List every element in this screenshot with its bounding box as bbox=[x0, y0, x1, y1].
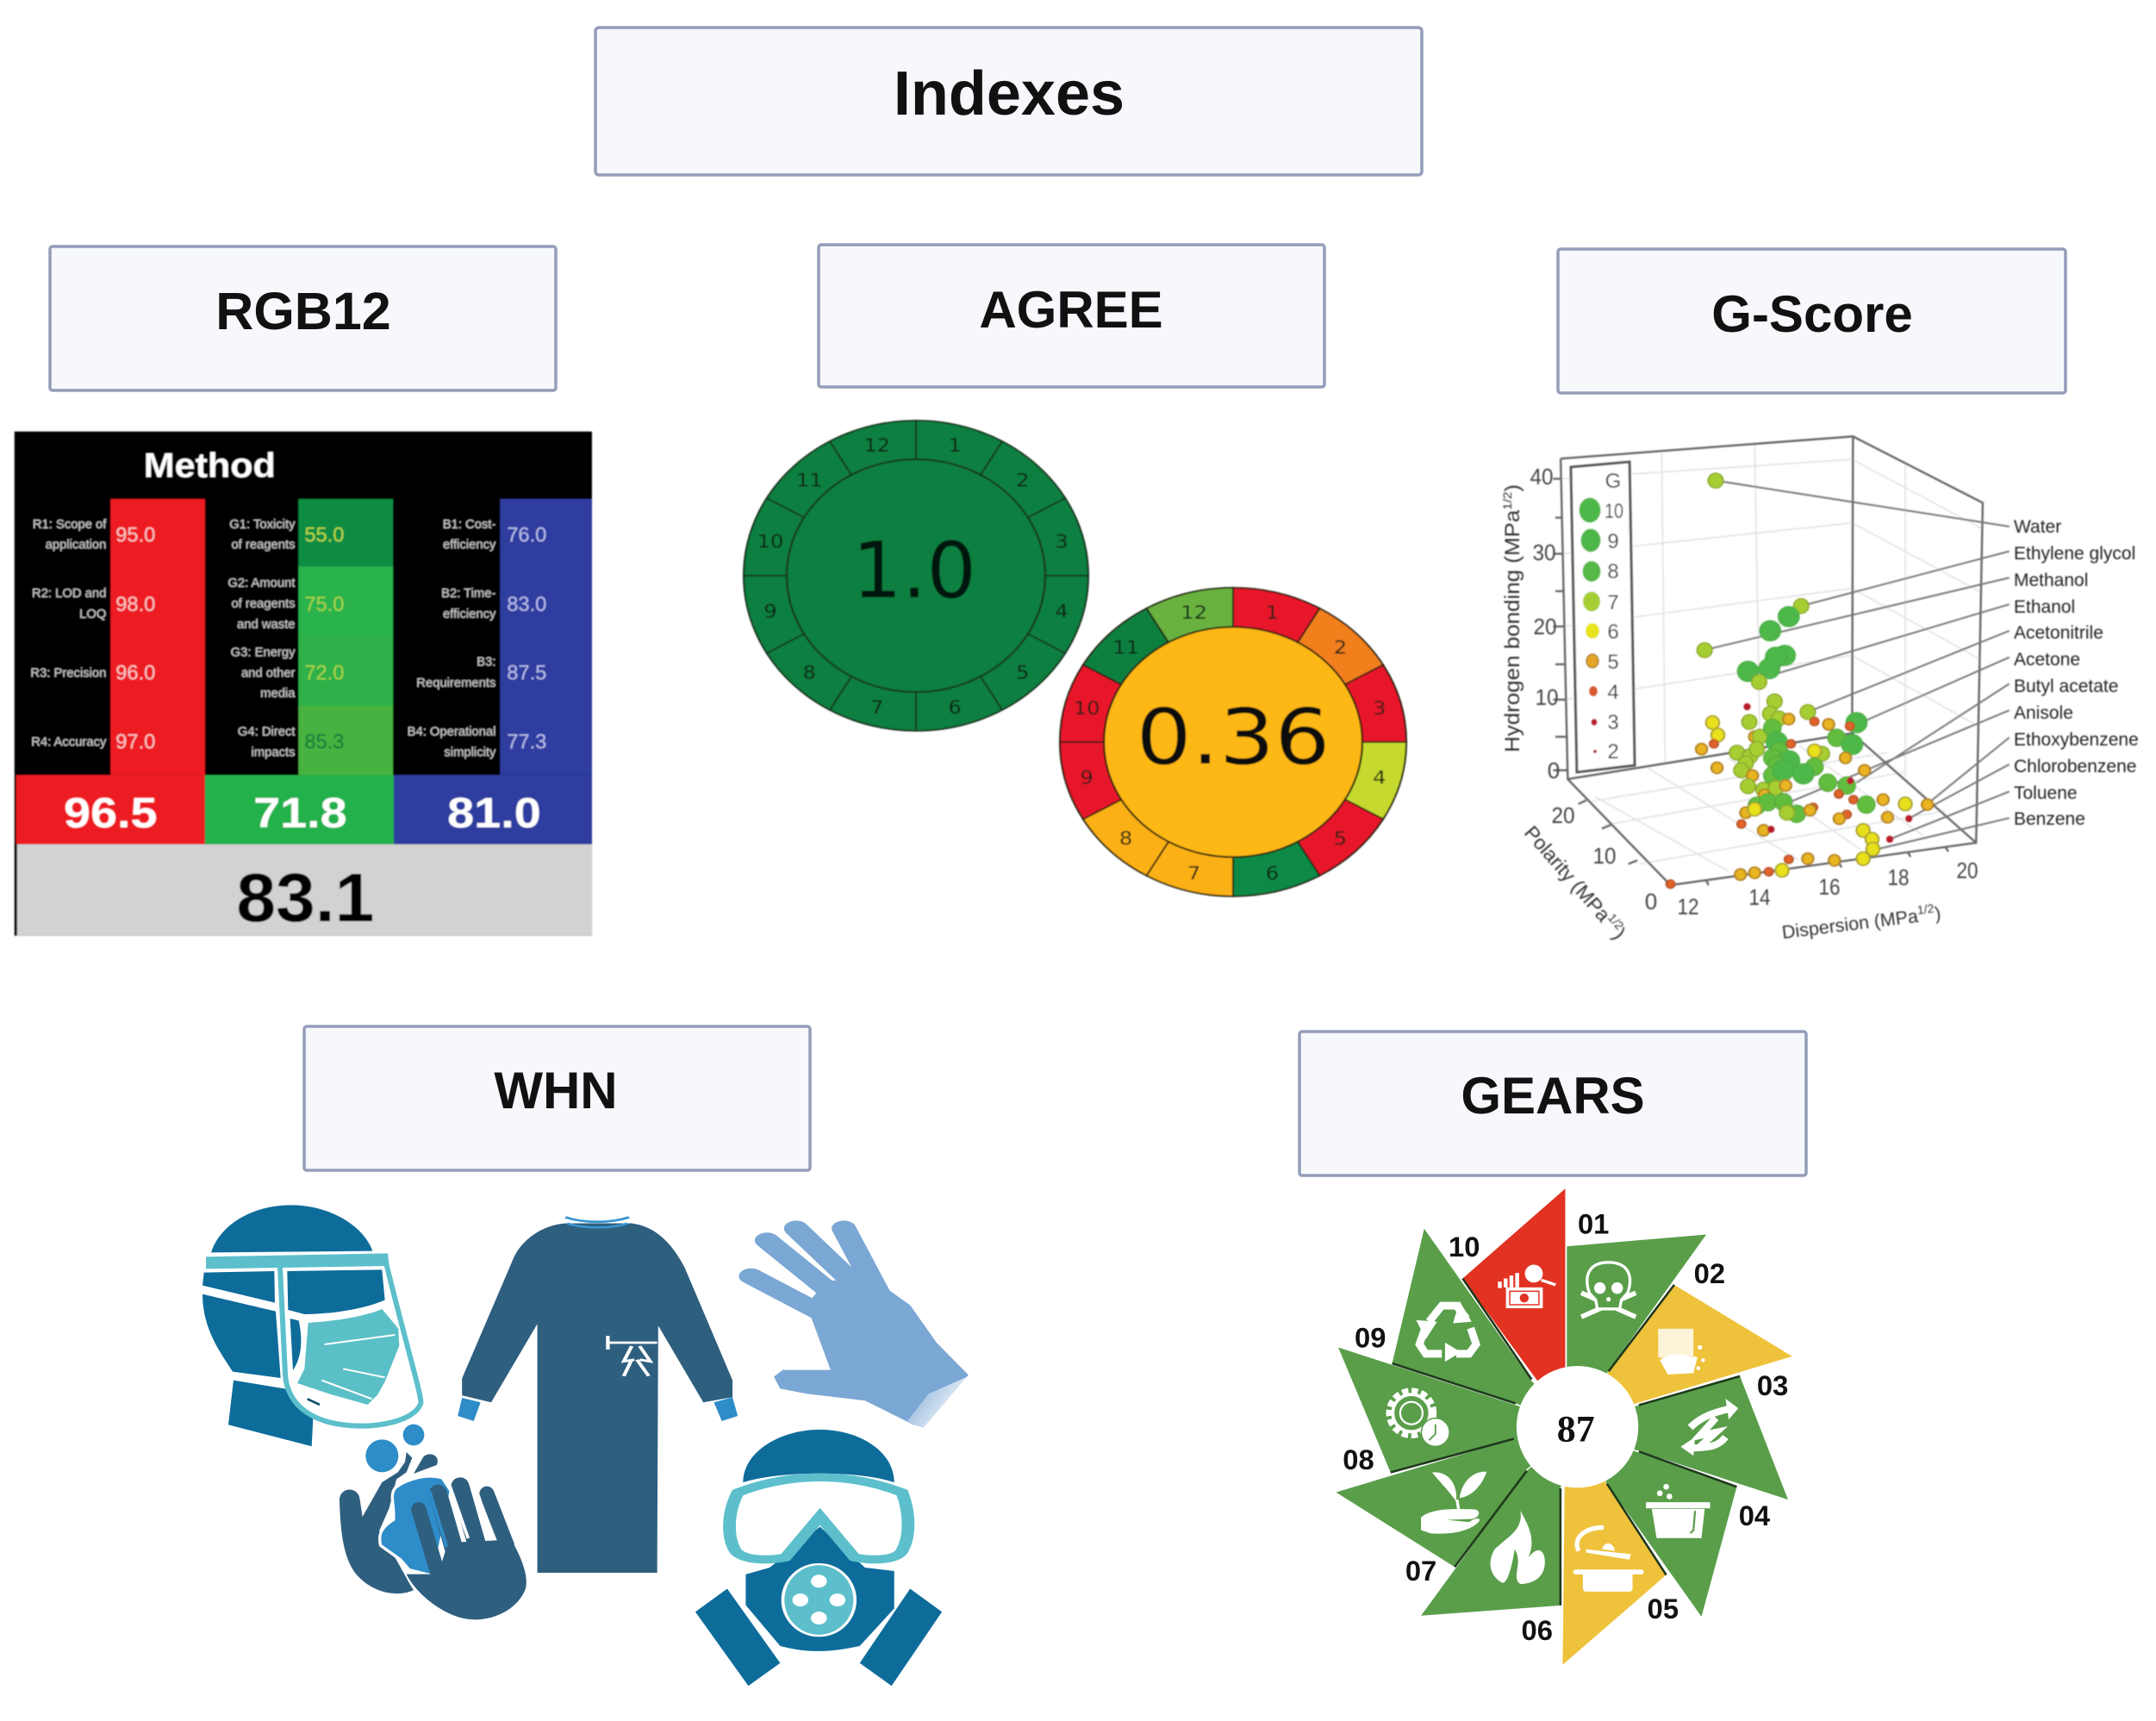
solvent labels: Ethoxybenzene bbox=[2014, 730, 2139, 750]
red column: R3: Precision bbox=[30, 666, 106, 680]
chart: AGREE pictogram score 1.0: 8 bbox=[803, 663, 816, 683]
dispersion axis title: 1/2 bbox=[1916, 901, 1935, 917]
green column: G4: Direct bbox=[238, 726, 296, 739]
legend: G: 2 bbox=[1607, 740, 1619, 764]
petal numbers bbox=[1343, 1207, 1788, 1646]
red column: 97.0 bbox=[115, 732, 155, 754]
green column: of reagents bbox=[231, 597, 295, 611]
y axis title: Hydrogen bonding (MPa bbox=[1501, 528, 1524, 752]
panel: WHN protective equipment icons bbox=[203, 1205, 971, 1686]
method label: Method bbox=[144, 446, 276, 484]
petal numbers: 02 bbox=[1694, 1257, 1725, 1289]
solvent labels: Ethylene glycol bbox=[2014, 544, 2135, 564]
heading: WHN: WHN bbox=[494, 1062, 618, 1119]
heading: RGB12 bbox=[50, 246, 556, 390]
chart: G-Score 3D scatter of solvents bbox=[1500, 436, 2139, 944]
green column: 85.3 bbox=[304, 732, 344, 754]
chart: AGREE pictogram score 0.36: 11 bbox=[1112, 637, 1139, 658]
title: Indexes: Indexes bbox=[894, 59, 1125, 128]
solvent labels: Chlorobenzene bbox=[2014, 757, 2136, 776]
chart: AGREE pictogram score 0.36 bbox=[1060, 588, 1406, 896]
chart: AGREE pictogram score 1.0: 12 bbox=[864, 435, 890, 457]
green column: 75.0 bbox=[304, 594, 344, 616]
legend: G bbox=[1571, 462, 1635, 772]
heading: WHN bbox=[304, 1026, 810, 1170]
chart: AGREE pictogram score 1.0: 10 bbox=[757, 532, 783, 552]
heading: GEARS bbox=[1299, 1032, 1806, 1175]
chart: AGREE pictogram score 0.36: 2 bbox=[1334, 637, 1347, 658]
red column: 96.5 bbox=[64, 789, 158, 837]
blue column: Requirements bbox=[416, 677, 495, 690]
green column bbox=[205, 499, 394, 845]
red column: application bbox=[46, 539, 106, 552]
chart: AGREE pictogram score 1.0: 4 bbox=[1055, 602, 1069, 622]
blue column: 76.0 bbox=[507, 525, 546, 547]
blue column: 77.3 bbox=[507, 732, 546, 754]
polarity axis title: ) bbox=[1609, 924, 1630, 944]
blue column: B2: Time- bbox=[441, 587, 495, 601]
blue column: efficiency bbox=[443, 608, 496, 621]
icon: box and hand bbox=[1658, 1329, 1705, 1375]
heading: G-Score: G-Score bbox=[1711, 285, 1913, 343]
panel: RGB12 scorecard bbox=[15, 432, 592, 936]
axis tick labels: 10 bbox=[1592, 843, 1617, 869]
chart: AGREE pictogram score 1.0: 2 bbox=[1016, 471, 1029, 491]
chart: AGREE pictogram score 1.0: 5 bbox=[1016, 663, 1029, 683]
legend: G: 7 bbox=[1607, 591, 1619, 614]
chart: AGREE pictogram score 1.0 bbox=[744, 421, 1088, 731]
petal numbers: 01 bbox=[1578, 1207, 1609, 1239]
icon: skull and crossbones bbox=[1581, 1263, 1636, 1317]
axis tick labels: 18 bbox=[1887, 864, 1910, 890]
icon: plant in hand bbox=[1421, 1472, 1486, 1534]
green column: G3: Energy bbox=[231, 645, 296, 660]
solvent labels: Acetone bbox=[2014, 650, 2080, 670]
axis tick labels: 20 bbox=[1534, 614, 1556, 639]
chart: AGREE pictogram score 1.0: 9 bbox=[763, 602, 777, 622]
red column bbox=[16, 499, 205, 845]
green column: and waste bbox=[237, 618, 295, 632]
red column: R4: Accuracy bbox=[31, 736, 107, 750]
blue column: B3: bbox=[477, 655, 495, 669]
chart: AGREE pictogram score 0.36: 10 bbox=[1074, 698, 1100, 719]
chart: AGREE pictogram score 0.36: 3 bbox=[1373, 698, 1386, 719]
chart: AGREE pictogram score 0.36: 5 bbox=[1334, 828, 1347, 849]
icon: flame bbox=[1491, 1511, 1545, 1584]
heading: G-Score bbox=[1558, 249, 2066, 393]
icon: gear and clock bbox=[1389, 1391, 1449, 1446]
icon: glove bbox=[751, 1228, 971, 1430]
green column: and other bbox=[241, 666, 296, 680]
blue column: 83.0 bbox=[507, 594, 546, 616]
solvent labels: Ethanol bbox=[2014, 597, 2075, 617]
red column: 98.0 bbox=[115, 594, 155, 616]
chart: AGREE pictogram score 0.36: 8 bbox=[1119, 828, 1132, 849]
axis tick labels: 12 bbox=[1677, 894, 1699, 920]
petal numbers: 08 bbox=[1343, 1444, 1374, 1475]
icon: pot with lid bbox=[1573, 1527, 1644, 1592]
icon: money and magnifier bbox=[1498, 1264, 1555, 1308]
center score: 87 bbox=[1557, 1408, 1595, 1450]
legend: G: 10 bbox=[1605, 500, 1623, 523]
chart: AGREE pictogram score 0.36: 1 bbox=[1266, 602, 1279, 623]
green column: 72.0 bbox=[304, 662, 344, 684]
green column: 55.0 bbox=[304, 525, 344, 547]
axis tick labels: 14 bbox=[1749, 884, 1770, 910]
solvent labels: Acetonitrile bbox=[2014, 623, 2103, 643]
chart: AGREE pictogram score 1.0: 1 bbox=[949, 435, 962, 457]
green column: of reagents bbox=[231, 539, 295, 552]
dispersion axis title: ) bbox=[1934, 903, 1942, 924]
petal numbers: 10 bbox=[1449, 1231, 1480, 1263]
y axis title: ) bbox=[1501, 484, 1524, 492]
heading: AGREE: AGREE bbox=[979, 281, 1163, 339]
solvent labels: Toluene bbox=[2014, 783, 2078, 803]
axis tick labels: 40 bbox=[1530, 464, 1553, 489]
axis tick labels: 16 bbox=[1818, 874, 1841, 900]
chart: AGREE pictogram score 0.36: 9 bbox=[1080, 768, 1094, 789]
axis tick labels: 20 bbox=[1956, 857, 1978, 883]
red column: R2: LOD and bbox=[32, 587, 106, 601]
red column: R1: Scope of bbox=[33, 518, 107, 532]
heading: RGB12: RGB12 bbox=[215, 282, 391, 340]
blue column: 81.0 bbox=[447, 789, 541, 837]
petal numbers: 09 bbox=[1355, 1321, 1386, 1353]
red column: 96.0 bbox=[115, 662, 155, 684]
heading: AGREE bbox=[819, 245, 1324, 387]
petal numbers: 07 bbox=[1405, 1555, 1436, 1587]
icon: pot bbox=[1646, 1484, 1710, 1538]
petal numbers: 04 bbox=[1739, 1500, 1771, 1531]
blue column: 87.5 bbox=[507, 662, 546, 684]
petal numbers: 05 bbox=[1648, 1593, 1679, 1624]
solvent labels: Methanol bbox=[2014, 571, 2088, 590]
icon: face shield and mask bbox=[203, 1205, 421, 1446]
axis tick labels: 30 bbox=[1532, 539, 1556, 565]
legend: G: 3 bbox=[1607, 711, 1619, 734]
axis tick labels: 10 bbox=[1536, 684, 1558, 710]
heading: GEARS: GEARS bbox=[1461, 1067, 1645, 1125]
green column: G2: Amount bbox=[227, 577, 296, 590]
title: Indexes bbox=[595, 28, 1422, 175]
polarity axis title: 1/2 bbox=[1605, 911, 1627, 932]
axis tick labels: 0 bbox=[1645, 889, 1657, 914]
legend: G: 5 bbox=[1607, 651, 1619, 674]
red column: 95.0 bbox=[115, 525, 155, 547]
icon: respirator and goggles bbox=[695, 1430, 942, 1686]
chart: AGREE pictogram score 1.0: 7 bbox=[870, 697, 883, 719]
chart: AGREE pictogram score 0.36: 12 bbox=[1181, 602, 1207, 623]
green column: G1: Toxicity bbox=[229, 518, 296, 532]
chart: GEARS pinwheel bbox=[1336, 1188, 1792, 1665]
icon: recycle bbox=[1416, 1301, 1476, 1362]
center score bbox=[1517, 1366, 1638, 1487]
legend: G: 6 bbox=[1607, 620, 1619, 644]
solvent labels: Water bbox=[2014, 517, 2061, 537]
polarity axis title: Polarity (MPa bbox=[1520, 821, 1615, 926]
green column: impacts bbox=[252, 745, 295, 760]
legend: G: G bbox=[1605, 470, 1621, 493]
blue column: B1: Cost- bbox=[443, 518, 495, 532]
icon: soap bubbles and hand washing bbox=[340, 1425, 527, 1619]
solvent labels: Benzene bbox=[2014, 809, 2085, 829]
blue column: simplicity bbox=[444, 745, 496, 760]
chart: AGREE pictogram score 1.0: 6 bbox=[949, 697, 962, 719]
chart: AGREE pictogram score 1.0: 3 bbox=[1055, 532, 1069, 552]
dispersion axis title: Dispersion (MPa bbox=[1781, 906, 1919, 943]
axis tick labels: 20 bbox=[1551, 802, 1575, 828]
icon: cycle arrows bbox=[1680, 1399, 1738, 1456]
legend: G: 9 bbox=[1607, 530, 1619, 553]
chart: AGREE pictogram score 0.36: 7 bbox=[1187, 863, 1200, 884]
solvent labels bbox=[2014, 517, 2139, 829]
blue column bbox=[394, 499, 592, 845]
blue column: efficiency bbox=[443, 539, 496, 552]
chart: AGREE pictogram score 0.36: 6 bbox=[1266, 863, 1279, 884]
chart: AGREE pictogram score 1.0: 1.0 bbox=[852, 527, 976, 616]
chart: AGREE pictogram score 0.36: 4 bbox=[1373, 768, 1386, 789]
green column: media bbox=[260, 687, 296, 701]
chart: AGREE pictogram score 1.0: 11 bbox=[796, 471, 822, 491]
legend: G: 4 bbox=[1607, 681, 1619, 704]
blue column: B4: Operational bbox=[408, 726, 495, 739]
petal numbers: 06 bbox=[1522, 1614, 1553, 1646]
green column: 71.8 bbox=[253, 789, 347, 837]
petal numbers: 03 bbox=[1757, 1369, 1788, 1401]
solvent labels: Butyl acetate bbox=[2014, 677, 2118, 696]
petals bbox=[1336, 1188, 1792, 1665]
solvent labels: Anisole bbox=[2014, 703, 2073, 723]
overall score bbox=[17, 845, 592, 936]
overall score: 83.1 bbox=[236, 859, 374, 936]
icon: surgical gown bbox=[458, 1217, 738, 1573]
red column: LOQ bbox=[79, 608, 106, 621]
plot frame, grid, points bbox=[1553, 436, 2010, 889]
y axis title: 1/2 bbox=[1500, 491, 1514, 510]
legend: G: 8 bbox=[1607, 560, 1619, 583]
chart: AGREE pictogram score 0.36: 0.36 bbox=[1136, 693, 1330, 783]
axis tick labels bbox=[1530, 464, 1978, 920]
axis tick labels: 0 bbox=[1548, 758, 1560, 783]
